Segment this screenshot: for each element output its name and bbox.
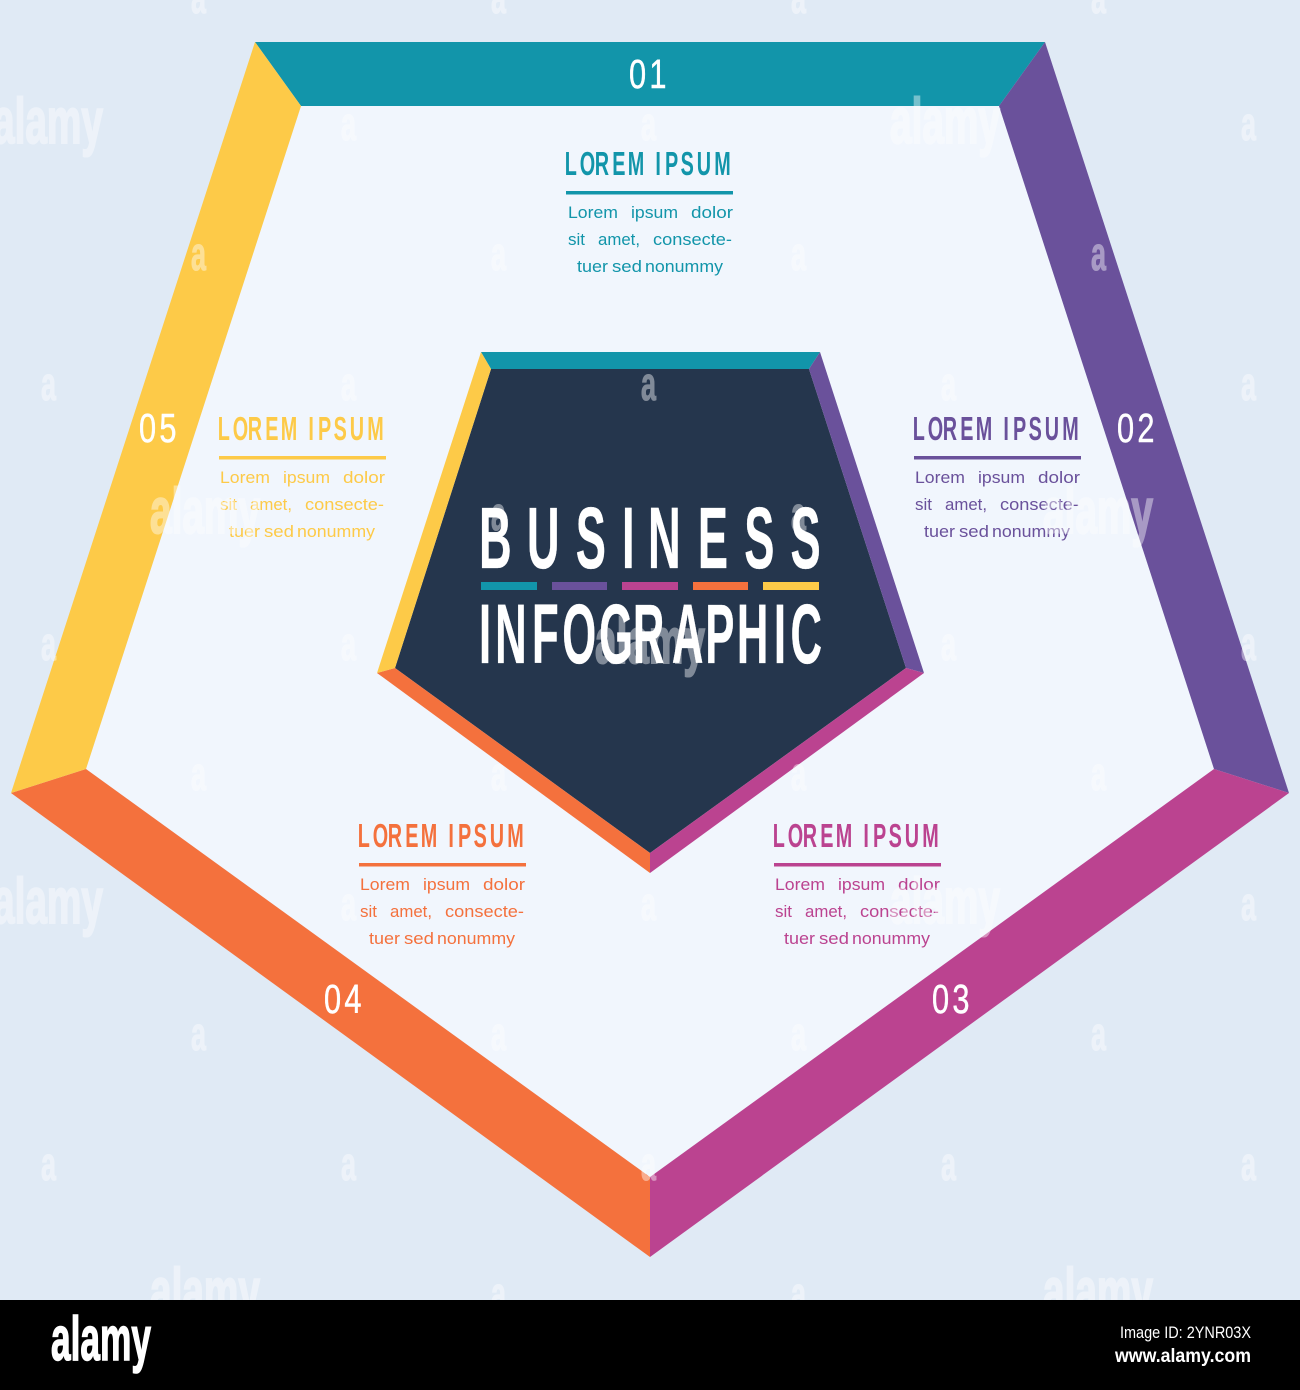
body 01: Lorem [568,204,618,222]
body 01: amet, [598,231,640,249]
body 02: amet, [945,496,987,514]
watermark overlay: a [341,1137,356,1190]
body 04: amet, [390,903,432,921]
segment 05 yellow [11,42,301,793]
inner panel [86,106,1214,1177]
segment 03 magenta [650,769,1289,1257]
rule 03 [774,863,941,866]
body 05: amet, [250,496,292,514]
number 04: 04 [324,976,362,1022]
body 03: sit [775,903,792,921]
footer logo: alamy [51,1305,151,1374]
heading 03: LOREM IPSUM [773,817,939,854]
title: infographic: INFOGRAPHIC [479,588,822,682]
body 01: consecte- [653,231,732,249]
watermark overlay: a [341,97,356,150]
text block 04 [358,817,526,948]
centre edge purple [809,352,924,673]
body 03: sed [819,930,849,948]
heading 05: LOREM IPSUM [218,410,384,447]
body 01: nonummy [645,258,724,276]
body 05: dolor [343,469,386,487]
watermark overlay: a [191,1007,206,1060]
segment 04 orange [11,769,650,1257]
body 04: sit [360,903,377,921]
watermark overlay: a [1241,877,1256,930]
centre pentagon [377,352,924,873]
body 01: dolor [691,204,734,222]
heading 01: LOREM IPSUM [565,145,731,182]
watermark overlay: a [791,747,806,800]
number 01: 01 [629,51,667,97]
watermark overlay: a [941,357,956,410]
segment 02 purple [999,42,1289,793]
body 05: Lorem [220,469,270,487]
body 05: consecte- [305,496,384,514]
body 03: tuer [784,930,816,948]
body 04: nonummy [437,930,516,948]
body 04: tuer [369,930,401,948]
centre edge orange [377,668,650,873]
centre edge teal [481,352,820,369]
rule 04 [359,863,526,866]
watermark overlay: a [641,97,656,150]
body 03: ipsum [838,876,885,894]
body 03: Lorem [775,876,825,894]
watermark overlay: a [1091,227,1106,280]
body 04: sed [404,930,434,948]
body 04: dolor [483,876,526,894]
body 01: sed [612,258,642,276]
rule 05 [219,456,386,460]
watermark overlay: a [1241,357,1256,410]
body 04: Lorem [360,876,410,894]
watermark overlay: a [491,487,506,540]
rule 02 [914,456,1081,460]
text block 01 [565,145,734,276]
body 02: Lorem [915,469,965,487]
body 04 [360,876,526,948]
footer url: www.alamy.com [1114,1346,1251,1367]
centre edge magenta [650,668,924,873]
watermark overlay: alamy [1043,1255,1153,1327]
title colour bars [481,582,819,590]
segment 01 teal [255,42,1045,106]
watermark overlay: alamy [595,605,705,677]
watermark overlay: a [1091,747,1106,800]
text block 02 [913,410,1081,541]
watermark overlay: a [1241,1137,1256,1190]
watermark overlay: a [41,357,56,410]
watermark overlay: a [341,877,356,930]
body 01 [568,204,734,276]
watermark overlay: a [491,227,506,280]
body 02: sed [959,523,989,541]
body 01: ipsum [631,204,678,222]
watermark overlay: a [341,357,356,410]
body 01: sit [568,231,585,249]
watermark overlay: a [941,617,956,670]
body 02 [915,469,1081,541]
body 05: tuer [229,523,261,541]
body 05: nonummy [297,523,376,541]
watermark overlay: a [941,1137,956,1190]
number 05: 05 [139,405,177,451]
number 03: 03 [932,976,970,1022]
watermark overlay: a [341,617,356,670]
body 05 [220,469,386,541]
body 02: sit [915,496,932,514]
watermark overlay: alamy [890,865,1000,937]
watermark overlay: a [41,1137,56,1190]
footer bar [0,1300,1300,1390]
body 04: ipsum [423,876,470,894]
watermark overlay: a [791,1267,806,1320]
body 03: consecte- [860,903,939,921]
heading 02: LOREM IPSUM [913,410,1079,447]
body 03 [775,876,941,948]
watermark overlay: a [491,1267,506,1320]
centre navy fill [395,369,906,853]
watermark overlay: alamy [1043,475,1153,547]
footer image id: Image ID: 2YNR03X [1120,1323,1251,1342]
body 03: nonummy [852,930,931,948]
body 02: ipsum [978,469,1025,487]
body 02: nonummy [992,523,1071,541]
body 05: ipsum [283,469,330,487]
watermark overlay: a [641,357,656,410]
body 05: sit [220,496,237,514]
body 01: tuer [577,258,609,276]
body 04: consecte- [445,903,524,921]
body 03: dolor [898,876,941,894]
watermark overlay: a [491,1007,506,1060]
title: business: BUSINESS [479,489,821,587]
watermark overlay: a [191,227,206,280]
watermark overlay: a [191,747,206,800]
watermark overlay: a [791,227,806,280]
centre edge yellow [377,352,491,673]
watermark overlay: a [491,747,506,800]
watermark overlay: a [641,1137,656,1190]
number 02: 02 [1117,405,1155,451]
watermark overlay: a [791,1007,806,1060]
watermark overlay: alamy [150,1255,260,1327]
watermark overlay: a [1241,617,1256,670]
body 02: tuer [924,523,956,541]
watermark overlay: a [1241,97,1256,150]
body 03: amet, [805,903,847,921]
rule 01 [566,191,733,194]
watermark overlay: alamy [890,85,1000,157]
watermark overlay: a [791,487,806,540]
body 02: dolor [1038,469,1081,487]
heading 04: LOREM IPSUM [358,817,524,854]
body 05: sed [264,523,294,541]
watermark overlay: a [41,617,56,670]
watermark overlay: a [1091,1007,1106,1060]
watermark overlay: alamy [150,475,260,547]
text block 03 [773,817,941,948]
watermark overlay: a [641,877,656,930]
body 02: consecte- [1000,496,1079,514]
text block 05 [218,410,386,541]
